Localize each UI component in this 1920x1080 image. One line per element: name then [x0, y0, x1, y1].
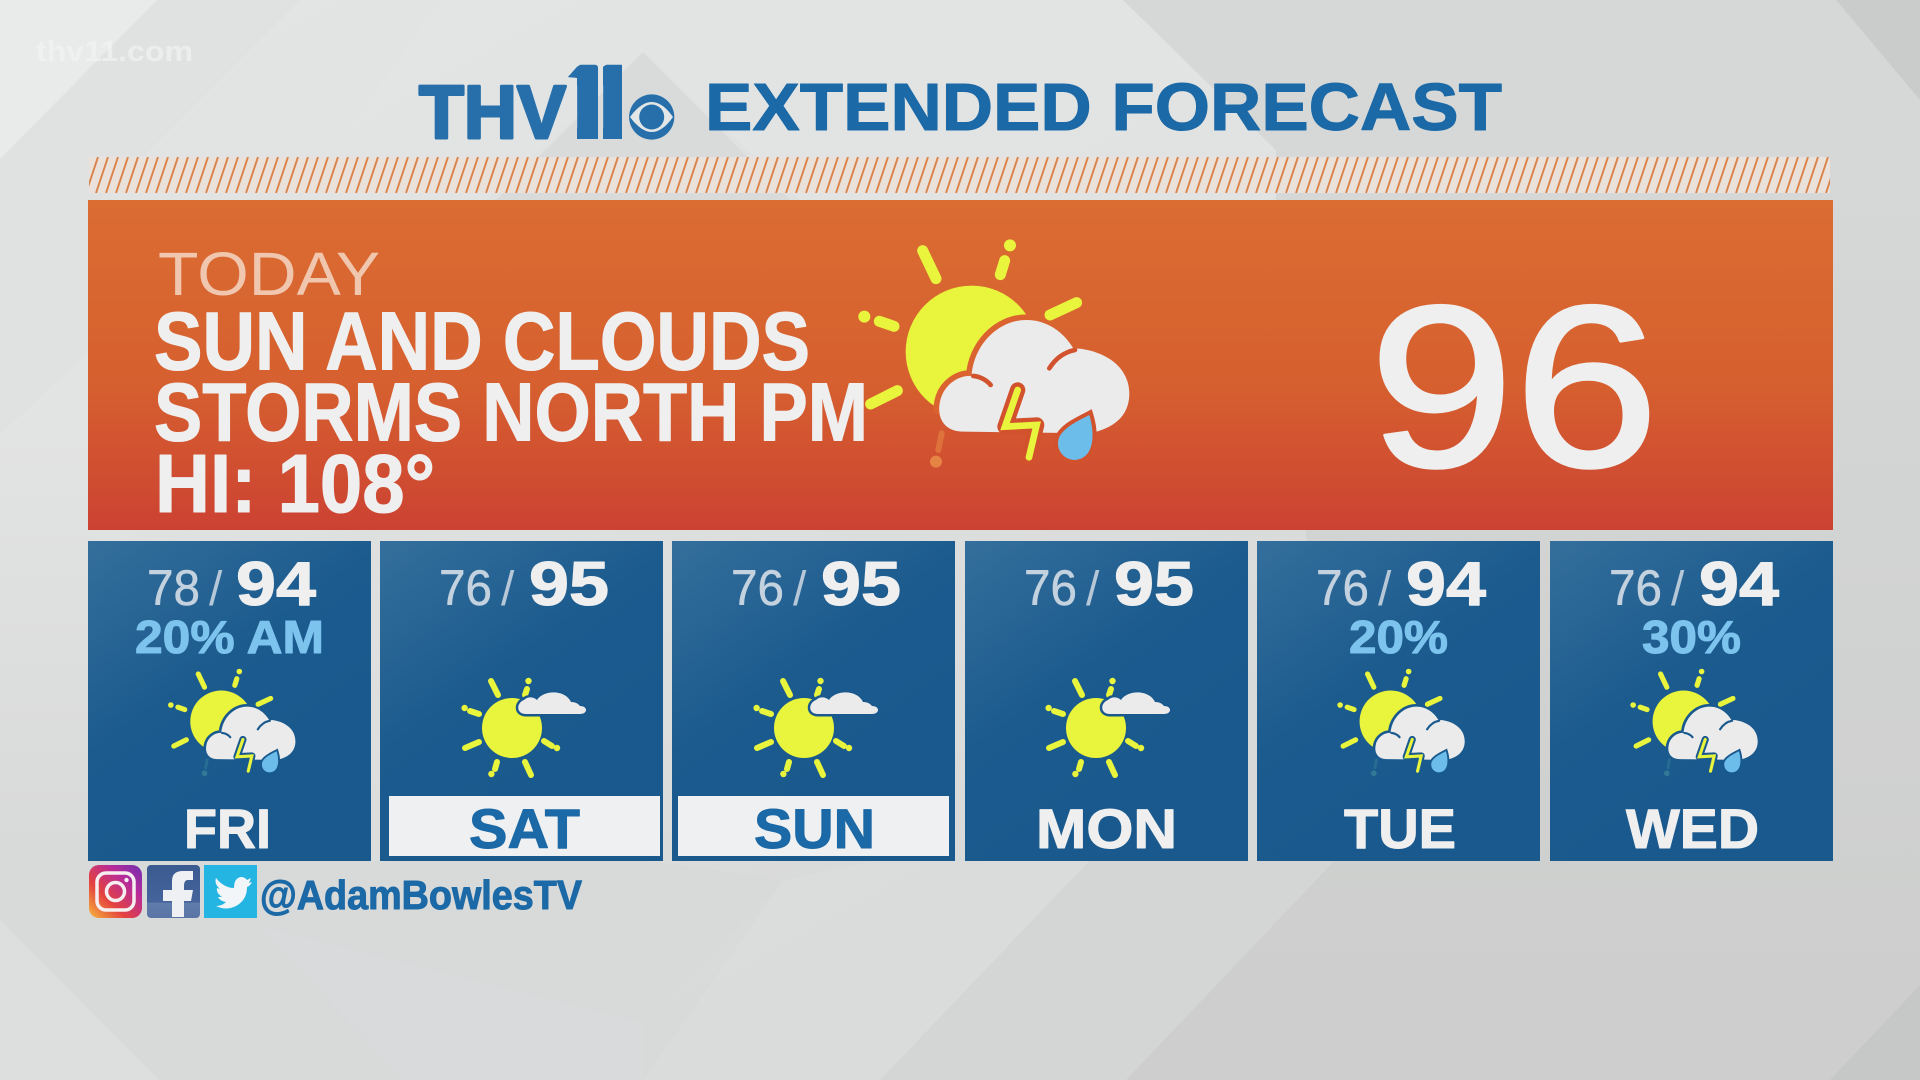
card: TUE: 76 [1316, 560, 1369, 616]
card: FRI [88, 541, 371, 861]
card: WED: 94 [1699, 550, 1780, 619]
current temperature: 96 [1369, 258, 1659, 515]
card: SAT: / [501, 563, 515, 616]
card: MON: / [1086, 563, 1100, 616]
card: TUE [1257, 541, 1540, 861]
card: WED: WED [1626, 797, 1759, 860]
card: MON: 76 [1024, 560, 1077, 616]
card: WED: 76 [1609, 560, 1662, 616]
condition text: STORMS NORTH PM [154, 366, 868, 458]
logo: THV11 CBS: 1 [581, 44, 641, 165]
icon: storm [858, 239, 1129, 468]
card: FRI: FRI [184, 797, 271, 860]
card: MON: MON [1036, 797, 1177, 860]
panel: today [88, 200, 1833, 530]
condition text [154, 294, 868, 530]
card: FRI: 20% AM [135, 611, 324, 663]
card: SUN [672, 541, 955, 861]
card: FRI: 78 [147, 560, 200, 616]
card: SUN: / [793, 563, 807, 616]
card: MON [965, 541, 1248, 861]
watermark: thv11.com: thv11.com [36, 36, 193, 68]
logo: THV11 CBS: THV [419, 70, 566, 154]
title: EXTENDED FORECAST [705, 70, 1502, 145]
card: SUN: SUN [754, 797, 875, 860]
logo: THV11 CBS [418, 64, 674, 140]
icon: instagram [89, 865, 142, 918]
card: WED [1550, 541, 1833, 861]
card: SAT [380, 541, 663, 861]
card: SAT: SAT [469, 797, 580, 860]
card: SAT: 76 [439, 560, 492, 616]
card: SUN: 95 [821, 550, 901, 619]
card: FRI: / [209, 563, 223, 616]
card: TUE: 94 [1406, 550, 1487, 619]
card: TUE: / [1378, 563, 1392, 616]
icon: facebook [147, 865, 200, 918]
card: MON: 95 [1114, 550, 1194, 619]
icon: twitter [204, 865, 257, 918]
card: FRI: 94 [236, 550, 317, 619]
card: TUE: TUE [1344, 797, 1456, 860]
card: TUE: 20% [1349, 611, 1448, 663]
card: SUN: 76 [731, 560, 784, 616]
card: SAT: 95 [529, 550, 609, 619]
condition text: HI: 108° [155, 437, 435, 530]
hatch band [89, 157, 1830, 193]
card: WED: / [1671, 563, 1685, 616]
social handle: @AdamBowlesTV [260, 872, 583, 918]
logo: THV11 CBS: 1 [555, 44, 615, 165]
card: WED: 30% [1642, 611, 1741, 663]
label: today: TODAY [158, 240, 380, 308]
condition text: SUN AND CLOUDS [154, 294, 810, 388]
